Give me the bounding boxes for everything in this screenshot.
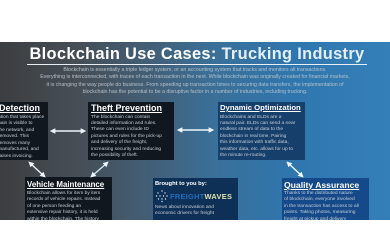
heading: theft prevention: Theft Prevention <box>91 103 162 113</box>
icon: dotted globe <box>156 190 168 202</box>
text: vehicle maintenance: of one person feeding an <box>27 204 81 209</box>
text: dynamic optimization: Blockchains and ELDs are a <box>220 114 281 120</box>
panel: vehicle maintenance <box>25 177 112 220</box>
text: vehicle maintenance <box>27 190 100 220</box>
sponsor text: economic drivers for freight <box>155 211 214 216</box>
text: quality assurance: Thanks to the distributed nature <box>284 191 353 196</box>
intro paragraph: Blockchain is essentially a triple ledger system, or an accounting system that tracks and monitors all transactions. <box>63 66 327 72</box>
text: theft prevention: the possibility of theft. <box>91 153 138 158</box>
sponsor logo <box>156 190 232 202</box>
heading: detection: Detection <box>0 103 40 113</box>
text: quality assurance: points. Taking photos, measuring <box>284 210 355 215</box>
heading: vehicle maintenance: Vehicle Maintenance <box>27 180 104 189</box>
sponsor label: Brought to you by: <box>155 181 207 187</box>
panel: theft prevention <box>88 102 174 160</box>
text: theft prevention: These can even include ID <box>91 127 149 132</box>
text: vehicle maintenance: Blockchain allows for item by item <box>27 191 100 196</box>
text: quality assurance <box>284 190 359 220</box>
sponsor text <box>155 204 214 216</box>
text: dynamic optimization: this information with traffic data, <box>220 140 289 145</box>
arrow: theft to vehicle <box>92 163 107 176</box>
arrow: dynamic to quality <box>288 163 302 176</box>
text: vehicle maintenance: records of vehicle repairs. Instead <box>27 197 100 202</box>
panel: quality assurance <box>282 178 369 220</box>
text: quality assurance: of blockchain, everyone involved <box>284 197 355 202</box>
text: detection <box>0 114 44 159</box>
panel: dynamic optimization <box>218 102 305 160</box>
title: Blockchain Use Cases: Trucking Industry <box>30 44 364 62</box>
intro paragraph: blockchain has the potential to be a disruptive factor in a number of industries, including trucking. <box>83 89 307 95</box>
title rule <box>27 64 367 65</box>
text: theft prevention: increasing security and reducing <box>91 147 161 152</box>
text: dynamic optimization: the minute re-routing. <box>220 153 266 158</box>
text: dynamic optimization: natural pair. ELDs can send a near <box>220 121 295 126</box>
background band <box>0 42 390 220</box>
intro paragraph: it is changing the way people do business. From speeding up transaction times to securing data transfers, the implementation of <box>46 82 344 88</box>
text: dynamic optimization: endless stream of data to the <box>220 127 283 132</box>
panel: brought to you by <box>153 178 238 220</box>
text: dynamic optimization: blockchain in real time. Pairing <box>220 134 286 139</box>
intro paragraph <box>40 66 350 95</box>
text: dynamic optimization: weather data, etc. allows for up to <box>220 147 293 152</box>
text: theft prevention: pictures and rules for the pick-up <box>91 134 162 139</box>
logo wordmark: FREIGHTWAVES <box>170 192 232 201</box>
text: theft prevention: and delivery of the freight, <box>91 140 147 145</box>
text: quality assurance: in the transaction has access to all <box>284 204 359 209</box>
sponsor text: News about innovation and <box>155 205 214 210</box>
text: vehicle maintenance: extensive repair history, it is held <box>27 210 98 215</box>
text: theft prevention: The blockchain can contain <box>91 114 150 120</box>
text: theft prevention: detailed information and rules. <box>91 121 157 126</box>
arrow: detection to theft <box>52 130 84 132</box>
intro paragraph: Everything is interconnected, with traces of each transaction in the next. While blockchain was originally created for financial markets, <box>40 74 350 80</box>
panel: detection <box>0 102 48 160</box>
heading: dynamic optimization: Dynamic Optimization <box>220 103 301 112</box>
arrow: theft to dynamic <box>179 129 212 131</box>
text: theft prevention <box>91 114 162 158</box>
arrow: detection to vehicle <box>30 163 44 176</box>
heading: quality assurance: Quality Assurance <box>284 180 359 190</box>
text: dynamic optimization <box>220 114 296 158</box>
